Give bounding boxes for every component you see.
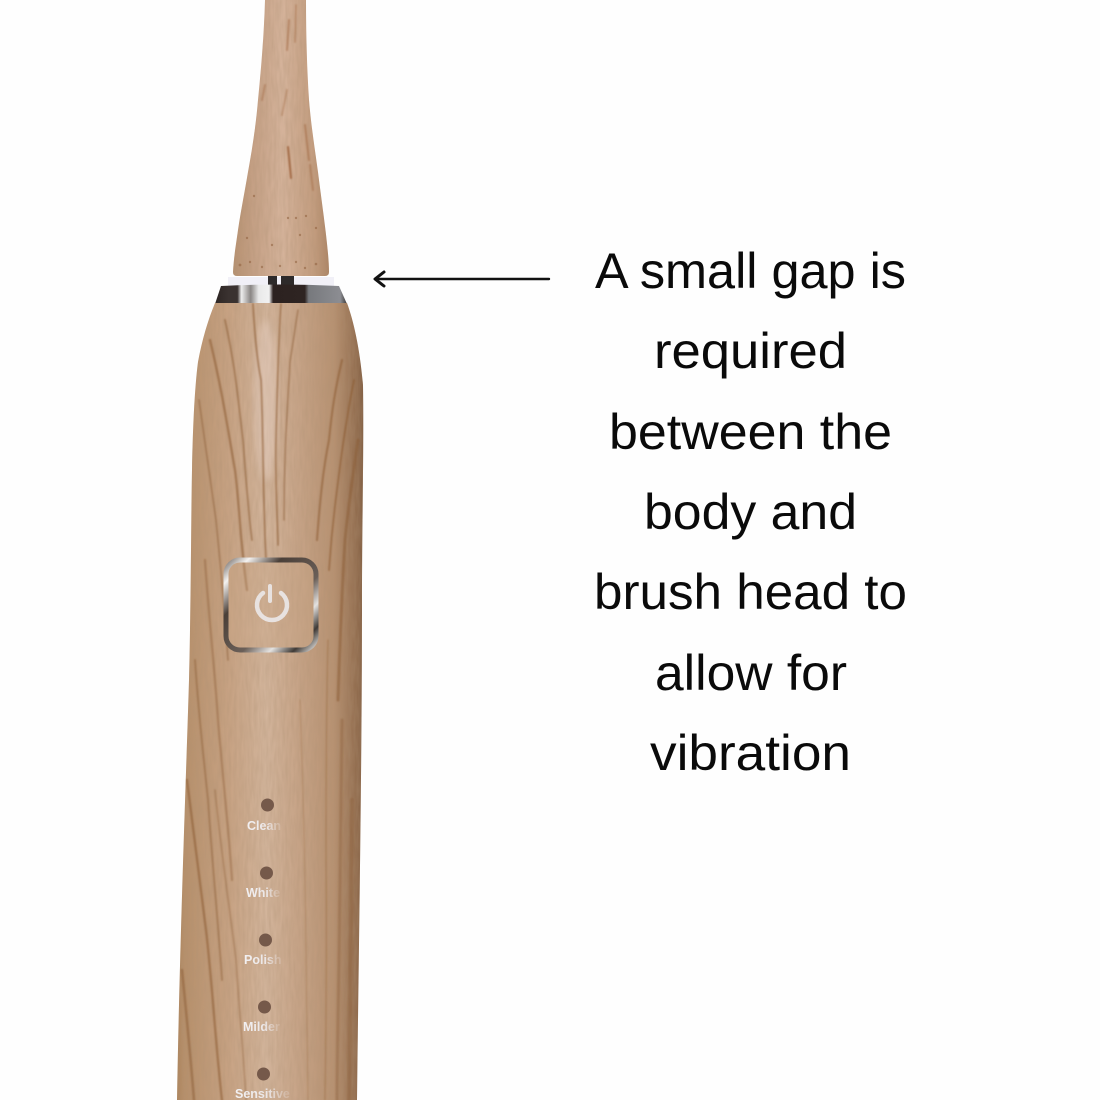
callout text xyxy=(594,243,907,781)
mode: White xyxy=(246,866,280,900)
mode: Clean: Clean xyxy=(247,819,281,833)
callout text: between the xyxy=(609,404,892,460)
mode: Sensitive xyxy=(235,1068,290,1100)
brush head xyxy=(233,0,329,276)
icon: power xyxy=(257,586,287,620)
gap pins xyxy=(228,276,334,286)
metal collar xyxy=(215,284,347,304)
power button xyxy=(226,560,316,650)
callout text: body and xyxy=(644,484,857,540)
arrow xyxy=(375,272,549,286)
handle body xyxy=(170,303,370,1100)
mode: Milder xyxy=(243,1000,280,1034)
callout text: A small gap is xyxy=(595,243,906,299)
callout text: required xyxy=(654,323,847,379)
toothbrush xyxy=(170,0,370,1100)
mode: Clean xyxy=(247,798,281,833)
mode: White: White xyxy=(246,886,280,900)
callout text: vibration xyxy=(650,725,851,781)
mode: Milder: Milder xyxy=(243,1020,280,1034)
mode: Polish: Polish xyxy=(244,953,282,967)
callout text: brush head to xyxy=(594,564,907,620)
mode: Polish xyxy=(244,934,282,967)
wood grain lines xyxy=(182,304,358,1100)
callout text: allow for xyxy=(655,645,847,701)
mode indicators xyxy=(235,798,290,1100)
